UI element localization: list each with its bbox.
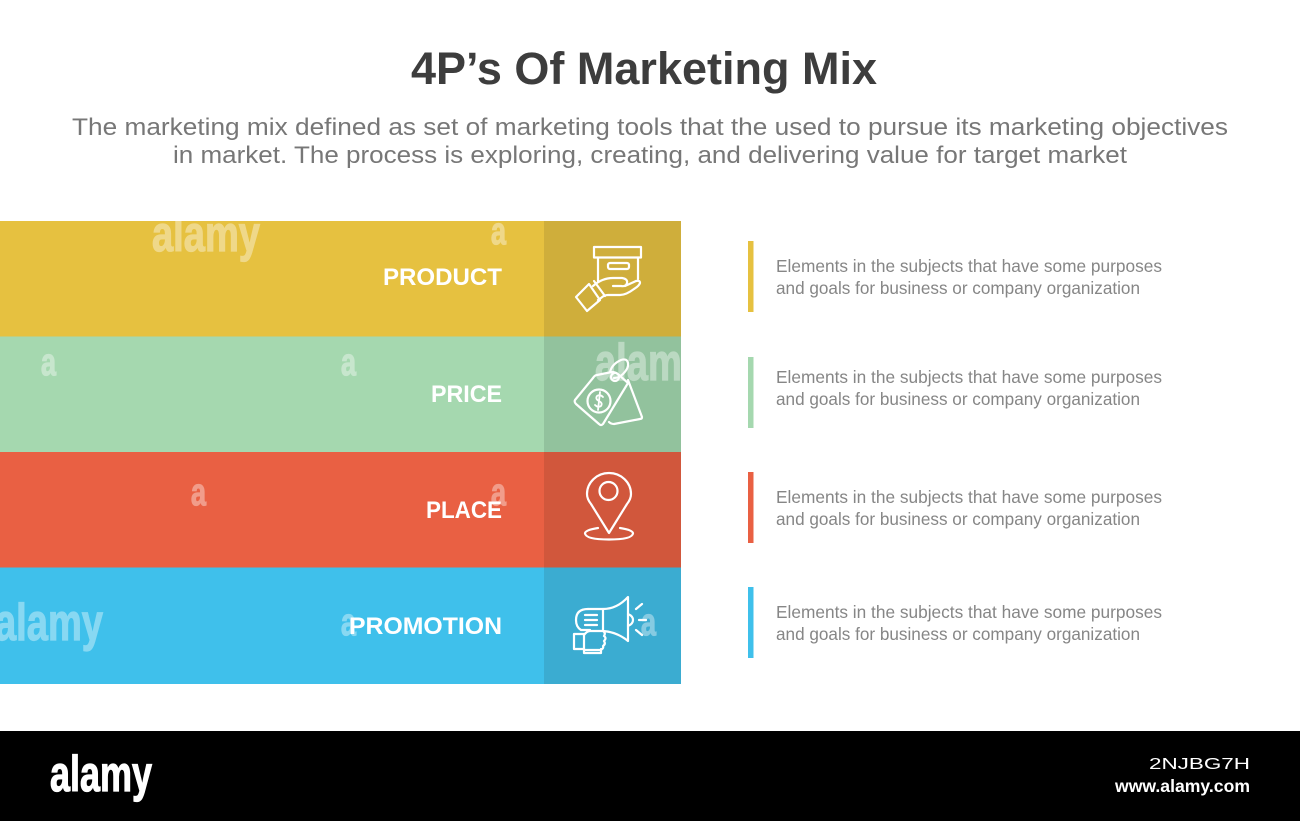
label: promotion: PROMOTION: [349, 613, 502, 640]
panel: promotion band: [0, 568, 681, 684]
watermarks: a: [641, 602, 657, 644]
watermarks: a: [491, 211, 507, 253]
subtitle: in market. The process is exploring, creating, and delivering value for target market: [173, 142, 1127, 169]
panel: place band: [0, 452, 681, 568]
description: place: Elements in the subjects that have some purposes: [776, 487, 1162, 507]
panel: product band: [0, 221, 681, 336]
description: product: [748, 241, 1162, 312]
description: product: Elements in the subjects that have some purposes: [776, 256, 1162, 276]
footer logo: alamy: [50, 746, 152, 802]
title: 4P’s Of Marketing Mix: [411, 43, 877, 94]
label: place: PLACE: [426, 497, 502, 524]
description: price: and goals for business or company organization: [776, 389, 1140, 409]
description: place: [748, 472, 1162, 543]
watermarks: alamy: [595, 334, 703, 392]
description: place: and goals for business or company organization: [776, 509, 1140, 529]
description: price: [748, 357, 1162, 428]
watermarks: a: [41, 342, 57, 384]
icon: hand holding box: [576, 247, 641, 311]
description: product: and goals for business or company organization: [776, 278, 1140, 298]
description: promotion: [748, 587, 1162, 658]
label: price: PRICE: [431, 381, 502, 408]
panel: price band: [0, 336, 681, 452]
watermarks: a: [341, 342, 357, 384]
site url: www.alamy.com: [1114, 776, 1250, 796]
label: product: PRODUCT: [383, 264, 502, 291]
description: promotion: and goals for business or company organization: [776, 624, 1140, 644]
icon: megaphone: [574, 597, 646, 653]
subtitle: The marketing mix defined as set of marketing tools that the used to pursue its marketing objectives: [72, 114, 1228, 141]
image id: 2NJBG7H: [1149, 756, 1250, 773]
watermarks: a: [491, 472, 507, 514]
watermarks: [0, 206, 703, 652]
footer bar: [0, 731, 1300, 821]
watermarks: a: [191, 472, 207, 514]
watermarks: alamy: [152, 206, 260, 262]
watermarks: a: [341, 602, 357, 644]
subtitle: [72, 114, 1228, 169]
icon: map pin: [585, 473, 633, 540]
description: price: Elements in the subjects that have some purposes: [776, 367, 1162, 387]
description: promotion: Elements in the subjects that have some purposes: [776, 602, 1162, 622]
icon: price tags: [575, 359, 642, 425]
